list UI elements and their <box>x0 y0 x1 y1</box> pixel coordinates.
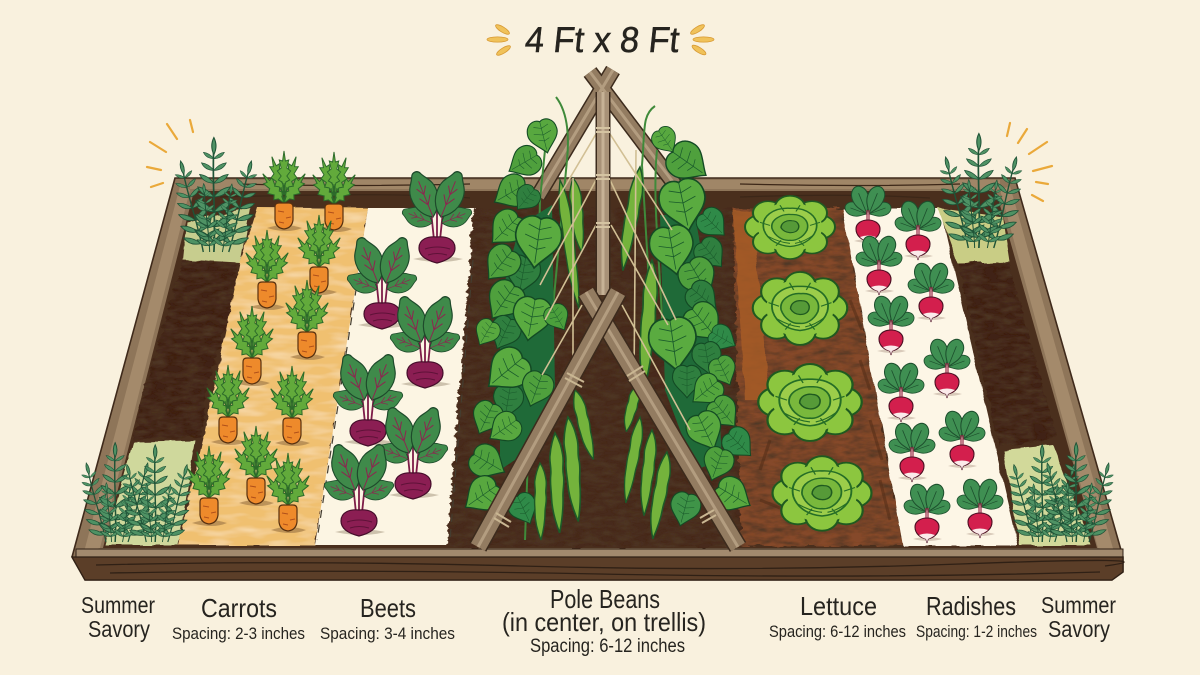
radish plants <box>843 184 1005 543</box>
strip: lettuce soil <box>733 208 903 546</box>
top board grain <box>220 184 960 198</box>
label: pole beans: Pole Beans <box>550 584 660 614</box>
label: summer savory right: Savory <box>1048 616 1110 642</box>
label: beets: Beets <box>360 593 416 623</box>
lower trellis poles <box>478 292 738 547</box>
summer savory plants <box>73 134 1122 545</box>
label: lettuce: Lettuce <box>800 591 877 621</box>
lettuce strip orange band <box>733 210 770 400</box>
lower bean pods <box>535 384 674 540</box>
bean leaves left <box>455 117 575 530</box>
trellis strings <box>540 134 690 430</box>
bottom-right savory patch <box>1003 445 1092 546</box>
savory top left <box>165 138 267 256</box>
strip: bottom-left savory patch <box>105 441 196 545</box>
label: summer savory right: Summer <box>1041 592 1116 618</box>
left rail highlight <box>84 186 190 552</box>
right title rays <box>689 23 714 56</box>
bean leaves right <box>646 123 761 530</box>
carrot plants <box>182 151 361 533</box>
front board face <box>72 557 1123 580</box>
label: radishes <box>916 591 1037 641</box>
label: pole beans <box>502 584 706 657</box>
strip: beets <box>315 208 476 545</box>
plant labels <box>81 584 1116 657</box>
front board grain <box>96 560 1124 576</box>
front board <box>76 549 1123 558</box>
trellis center post <box>596 92 610 295</box>
label: beets: Spacing: 3-4 inches <box>320 624 455 643</box>
label: summer savory left: Summer <box>81 592 155 618</box>
label: pole beans: Spacing: 6-12 inches <box>530 636 685 657</box>
label: carrots <box>172 593 305 643</box>
label: summer savory right <box>1041 592 1116 642</box>
right rail highlight <box>1000 186 1114 552</box>
label: summer savory left: Savory <box>88 616 150 642</box>
lettuce soil texture <box>760 300 890 520</box>
dark foliage backing <box>500 205 722 470</box>
top-right savory patch <box>938 208 1010 264</box>
savory bottom left <box>73 443 200 545</box>
top board top face <box>190 180 1000 189</box>
dashed bed dividers <box>317 258 473 540</box>
strip: carrots <box>178 207 368 545</box>
label: carrots: Carrots <box>201 593 277 623</box>
bean vines and tendrils <box>525 97 700 540</box>
strip: right soil <box>958 262 1057 448</box>
upper bean pods <box>555 166 660 390</box>
strip: top-left savory patch <box>183 208 250 263</box>
savory top right <box>930 134 1032 252</box>
label: summer savory left <box>81 592 155 642</box>
title: bed dimensions <box>487 19 714 60</box>
label: radishes: Spacing: 1-2 inches <box>916 622 1037 641</box>
label: beets <box>320 593 455 643</box>
title text: 4 Ft x 8 Ft <box>523 19 681 60</box>
strip: radishes <box>843 209 1018 546</box>
rays: top left savory <box>147 120 193 187</box>
label: lettuce <box>769 591 906 641</box>
inner wall shadow <box>103 191 1097 548</box>
label: lettuce: Spacing: 6-12 inches <box>769 622 906 641</box>
label: pole beans: (in center, on trellis) <box>502 607 706 637</box>
pole bean trellis <box>455 70 761 547</box>
upper trellis poles <box>538 70 679 196</box>
strip: beans soil <box>447 208 745 547</box>
label: carrots: Spacing: 2-3 inches <box>172 624 305 643</box>
strip: left soil <box>133 260 237 440</box>
raised bed frame and soil strips <box>72 178 1124 580</box>
savory bottom right <box>1001 443 1122 545</box>
lettuce heads <box>745 196 872 531</box>
label: radishes: Radishes <box>926 591 1016 621</box>
left title rays <box>487 23 512 57</box>
wooden frame outer <box>72 178 1123 580</box>
beet plants <box>321 167 475 536</box>
rays: top right savory <box>1007 123 1052 201</box>
